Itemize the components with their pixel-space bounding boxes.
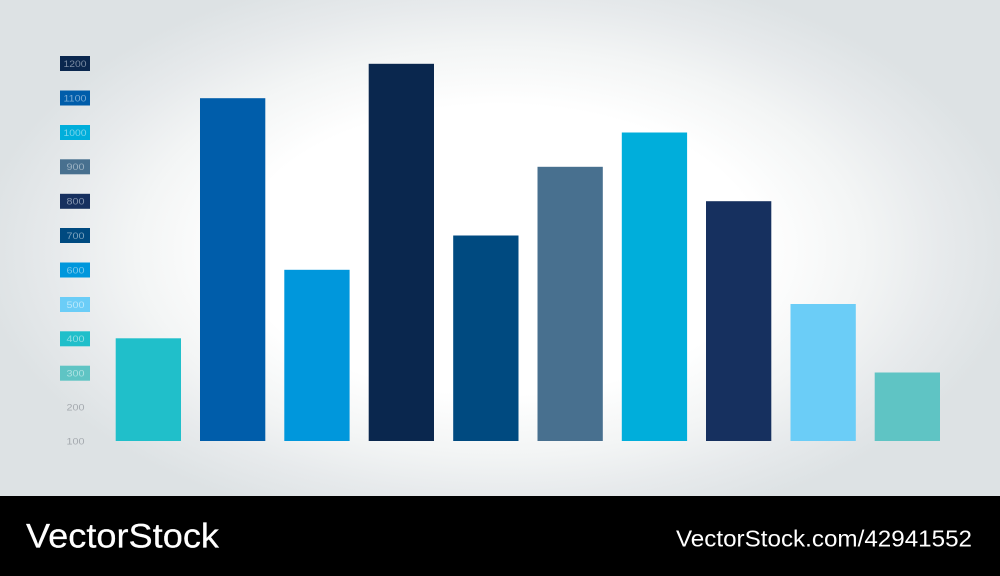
legend label: 100: 100 (66, 437, 84, 448)
legend tag: 600 (60, 262, 90, 278)
bar: 1200 (369, 64, 434, 441)
legend label: 200: 200 (66, 402, 84, 413)
legend tag: 300 (60, 366, 90, 381)
y-axis legend (60, 56, 90, 448)
bar: 300 (875, 372, 940, 441)
bar: 700 (453, 236, 518, 441)
footer brand: VectorStock (26, 518, 220, 556)
legend tag: 1000: 1000 (64, 128, 86, 139)
legend tag: 1000 (60, 125, 90, 140)
legend tag: 800: 800 (66, 197, 84, 208)
bar: 800 (706, 201, 771, 441)
legend tag: 400: 400 (66, 334, 84, 345)
legend tag: 500 (60, 297, 90, 312)
legend tag: 1200 (60, 56, 90, 71)
bar: 900 (538, 167, 603, 441)
bar: 400 (116, 338, 181, 441)
legend tag: 400 (60, 331, 90, 346)
legend tag: 300: 300 (66, 368, 84, 380)
legend tag: 500: 500 (66, 300, 84, 311)
bars (116, 64, 940, 441)
legend tag: 1100: 1100 (64, 93, 86, 104)
legend tag: 1200: 1200 (64, 59, 86, 70)
bar: 500 (790, 304, 856, 441)
legend tag: 1100 (60, 90, 90, 106)
legend tag: 900 (60, 159, 90, 174)
legend tag: 800 (60, 194, 90, 209)
bar: 600 (284, 270, 350, 441)
footer url: VectorStock.com/42941552 (676, 526, 972, 552)
bar: 1100 (200, 98, 265, 441)
legend tag: 600: 600 (66, 265, 84, 276)
legend tag: 700 (60, 228, 90, 243)
footer band (0, 496, 1000, 576)
bar: 1000 (622, 132, 687, 441)
legend tag: 900: 900 (66, 162, 84, 173)
legend tag: 700: 700 (66, 231, 84, 242)
